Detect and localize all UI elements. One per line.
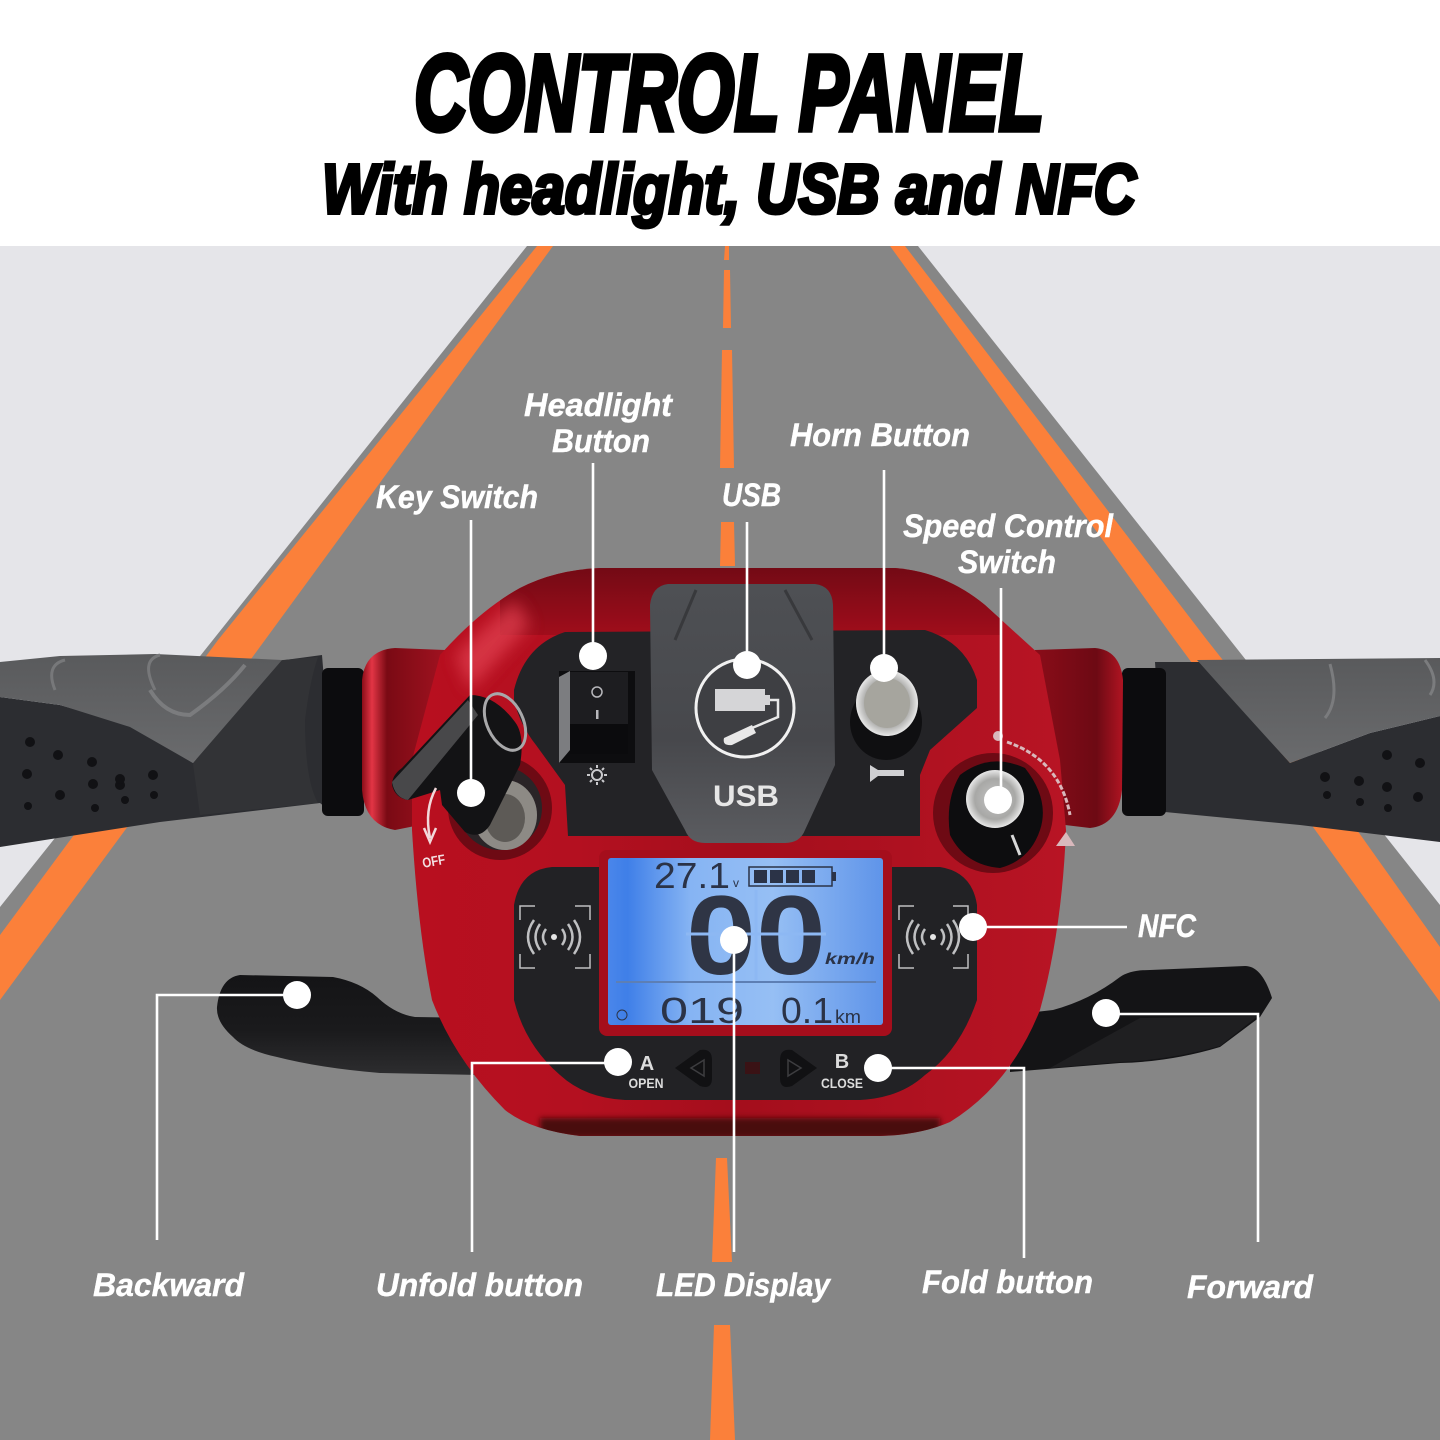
callout: headlight button	[524, 387, 673, 670]
red body highlight	[455, 600, 530, 690]
left orange road line	[0, 246, 553, 1000]
callout: forward	[1092, 999, 1314, 1305]
grip dimples	[1320, 750, 1425, 812]
fold button label B CLOSE	[821, 1051, 863, 1091]
callout: headlight button: Button	[552, 423, 650, 459]
callout: NFC	[959, 908, 1197, 944]
callout: headlight button: Headlight	[524, 387, 673, 423]
NFC icon left	[520, 906, 590, 968]
callout: horn button: Horn Button	[790, 417, 970, 453]
callout: LED display	[656, 926, 832, 1303]
centre dashed road line	[710, 246, 735, 1440]
LCD display: km	[835, 1007, 861, 1027]
right red barrel	[1035, 648, 1123, 828]
callout: fold button	[864, 1054, 1093, 1300]
unfold button label A OPEN	[628, 1053, 664, 1091]
bottom edge dark reflection	[540, 1118, 940, 1138]
callout: key switch	[376, 479, 538, 807]
panel: black lower plate	[514, 867, 977, 1100]
open and close arrow buttons	[675, 1050, 817, 1087]
NFC icon right	[899, 906, 968, 968]
callout: backward	[93, 981, 311, 1303]
callout: key switch: Key Switch	[376, 479, 538, 515]
speed scale arc	[1007, 742, 1070, 815]
speed reading: 00	[686, 873, 826, 998]
callout: USB: USB	[722, 477, 781, 513]
battery gauge	[749, 867, 836, 886]
fold button label B CLOSE: CLOSE	[821, 1075, 863, 1091]
voltage reading: 27.1	[654, 855, 730, 896]
odometer readings: 019	[660, 990, 744, 1031]
speed reading segment gaps	[686, 890, 826, 980]
LCD display	[599, 850, 892, 1036]
grip dimples	[22, 737, 158, 812]
left red barrel	[362, 648, 445, 830]
callout: horn button	[790, 417, 970, 682]
headlight rocker switch	[559, 671, 635, 785]
unfold button label A OPEN: A	[640, 1053, 654, 1075]
right orange road line	[890, 246, 1440, 1002]
callout: speed control switch: Speed Control	[903, 508, 1114, 544]
callout: USB	[722, 477, 781, 679]
callout: unfold button: Unfold button	[376, 1267, 583, 1303]
callout: speed control switch	[903, 508, 1114, 814]
panel: red control unit body	[412, 560, 1066, 1140]
right hand grip	[1122, 658, 1440, 842]
LCD display: v	[733, 876, 739, 890]
panel: black upper switch plate	[514, 630, 977, 836]
icon: battery and plug in circle	[696, 659, 794, 757]
horn button	[850, 670, 922, 782]
USB cover	[650, 584, 835, 843]
callout: LED display: LED Display	[656, 1267, 832, 1303]
callout: backward: Backward	[93, 1267, 245, 1303]
grip black collar	[1122, 668, 1166, 816]
callout: fold button: Fold button	[922, 1264, 1093, 1300]
key fob	[392, 695, 522, 835]
right brake lever (forward)	[1010, 966, 1272, 1072]
callout: forward: Forward	[1187, 1269, 1314, 1305]
key switch	[392, 687, 552, 871]
key switch: OFF	[421, 851, 447, 871]
fold button label B CLOSE: B	[835, 1051, 849, 1073]
callout: unfold button	[376, 1048, 632, 1303]
speed control knob	[933, 731, 1075, 873]
subtitle: With headlight, USB and NFC	[322, 150, 1137, 228]
USB label: USB	[713, 780, 779, 813]
LCD display: 0.1	[781, 990, 833, 1031]
left brake lever (backward)	[217, 975, 480, 1075]
OFF arrow and label	[424, 788, 436, 842]
grip black collar	[322, 668, 364, 816]
speed unit: km/h	[825, 951, 875, 968]
left hand grip	[0, 654, 364, 847]
icon: headlight sun	[587, 765, 607, 785]
icon: horn	[870, 765, 904, 782]
panel: white header background	[0, 0, 1440, 246]
callout: NFC: NFC	[1138, 908, 1197, 944]
title: CONTROL PANEL	[414, 32, 1044, 153]
unfold button label A OPEN: OPEN	[628, 1075, 664, 1091]
callout: speed control switch: Switch	[958, 544, 1056, 580]
